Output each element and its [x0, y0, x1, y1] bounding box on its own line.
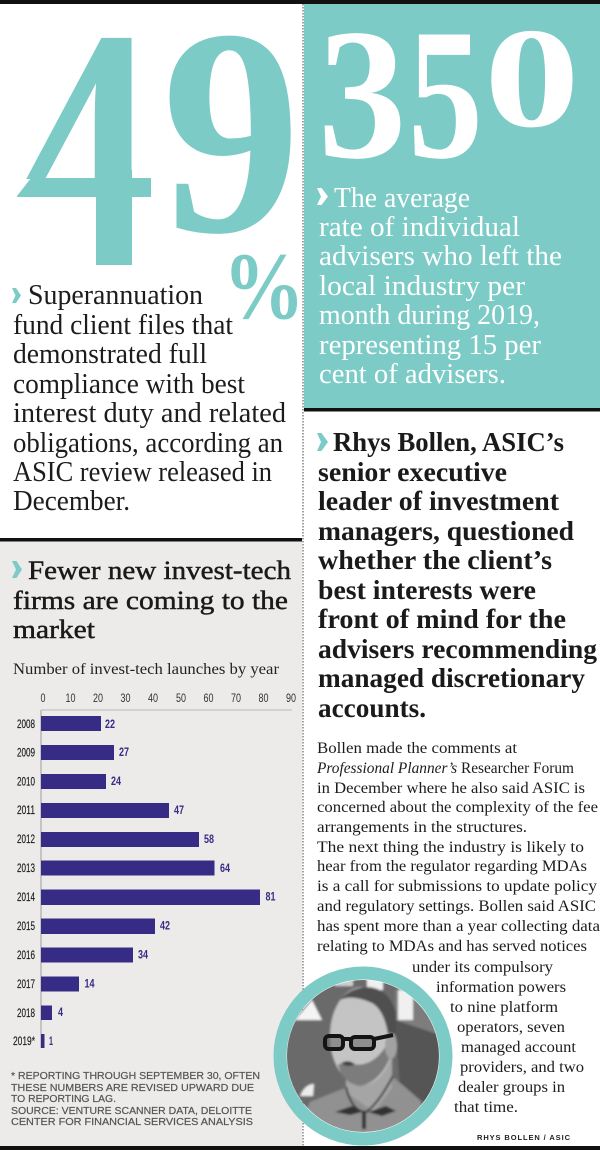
- text block: article body: in December where he also said ASIC is: [317, 780, 585, 797]
- text block: article body: has spent more than a year collecting data: [317, 918, 600, 935]
- big number: 350: [318, 0, 580, 198]
- text block: superannuation description: Superannuation: [28, 280, 203, 311]
- text block: article body: under its compulsory: [412, 959, 553, 976]
- year labels: [13, 719, 35, 1048]
- heading: Rhys Bollen pull quote: managed discretionary: [318, 663, 585, 693]
- heading: fewer new invest-tech firms: market: [13, 615, 96, 644]
- heading: Rhys Bollen pull quote: senior executive: [318, 457, 507, 487]
- heading: Rhys Bollen pull quote: accounts.: [318, 693, 426, 723]
- x axis labels: 80: [258, 693, 268, 705]
- value labels: 58: [204, 834, 214, 846]
- value labels: 4: [58, 1007, 63, 1019]
- text block: article body: that time.: [454, 1099, 518, 1116]
- heading: fewer new invest-tech firms: Fewer new invest-tech: [28, 556, 291, 585]
- icon: chevron: [317, 188, 328, 205]
- text block: article body: information powers: [436, 979, 566, 996]
- x axis labels: 0: [40, 693, 46, 705]
- x axis labels: 20: [93, 693, 103, 705]
- value labels: 1: [49, 1036, 53, 1048]
- footnote and source: SOURCE: VENTURE SCANNER DATA, DELOITTE: [11, 1106, 252, 1117]
- text block: article body: The next thing the industry is likely to: [317, 839, 584, 856]
- value labels: [49, 719, 276, 1048]
- photo credit: RHYS BOLLEN / ASIC: [477, 1133, 571, 1142]
- year labels: 2013: [17, 863, 35, 875]
- panel: 49 per cent statistic: [12, 36, 298, 510]
- value labels: 34: [138, 950, 148, 962]
- panel: 350 advisers statistic: [317, 0, 580, 390]
- value labels: 24: [111, 776, 121, 788]
- panel: grey chart background: [0, 541, 302, 1146]
- text block: superannuation description: [13, 280, 286, 517]
- text block: superannuation description: ASIC review released in: [13, 457, 272, 488]
- panel: invest-tech chart section: [11, 556, 296, 1128]
- year labels: 2015: [17, 921, 35, 933]
- text block: article body: Professional Planner’s Researcher Forum: [316, 760, 575, 777]
- text block: article body: arrangements in the structures.: [317, 819, 527, 836]
- x axis labels: 30: [120, 693, 130, 705]
- x axis labels: 10: [66, 693, 76, 705]
- footnote and source: THESE NUMBERS ARE REVISED UPWARD DUE: [11, 1083, 254, 1094]
- text block: article body: and regulatory settings. Bollen said ASIC: [317, 898, 596, 915]
- text block: article body: [316, 740, 600, 1116]
- photo: portrait of Rhys Bollen: [280, 973, 446, 1139]
- text block: superannuation description: demonstrated full: [13, 339, 207, 370]
- x axis labels: 90: [286, 693, 296, 705]
- text block: article body: dealer groups in: [458, 1079, 565, 1096]
- text block: superannuation description: obligations, according an: [13, 428, 283, 459]
- footnote and source: [11, 1071, 260, 1128]
- text block: article body: is a call for submissions to update policy: [317, 878, 597, 895]
- footnote and source: TO REPORTING LAG.: [11, 1094, 116, 1105]
- x axis labels: 60: [204, 693, 214, 705]
- big number: 49%: [17, 36, 298, 320]
- text block: adviser exit rate: month during 2019,: [319, 300, 540, 331]
- heading: Rhys Bollen pull quote: Rhys Bollen, ASIC’s: [333, 427, 564, 457]
- year labels: 2010: [17, 776, 35, 788]
- text block: adviser exit rate: cent of advisers.: [319, 359, 506, 390]
- text block: adviser exit rate: [319, 183, 562, 390]
- year labels: 2008: [17, 719, 35, 731]
- year labels: 2017: [17, 979, 35, 991]
- heading: Rhys Bollen pull quote: [318, 427, 598, 723]
- text block: article body: relating to MDAs and has served notices: [317, 938, 587, 955]
- value labels: 81: [266, 892, 276, 904]
- year labels: 2019*: [13, 1036, 35, 1048]
- text block: article body: to nine platform: [450, 999, 559, 1016]
- chart subtitle: Number of invest-tech launches by year: [13, 661, 280, 678]
- heading: Rhys Bollen pull quote: whether the client’s: [318, 545, 552, 575]
- text block: superannuation description: interest duty and related: [13, 398, 286, 429]
- text block: superannuation description: fund client files that: [13, 310, 233, 341]
- big number: 49%: %: [223, 234, 305, 339]
- x axis labels: 50: [176, 693, 186, 705]
- heading: Rhys Bollen pull quote: leader of investment: [318, 486, 559, 516]
- year labels: 2011: [17, 805, 35, 817]
- text block: article body: managed account: [461, 1039, 577, 1056]
- bars: [41, 716, 260, 1048]
- text block: article body: concerned about the complexity of the fee: [317, 799, 598, 816]
- value labels: 42: [160, 920, 170, 932]
- x axis labels: [40, 693, 296, 705]
- x axis labels: 40: [148, 693, 158, 705]
- heading: Rhys Bollen pull quote: managers, questioned: [318, 516, 574, 546]
- footnote and source: * REPORTING THROUGH SEPTEMBER 30, OFTEN: [11, 1071, 260, 1082]
- year labels: 2012: [17, 834, 35, 846]
- text block: article body: Bollen made the comments at: [317, 740, 518, 757]
- icon: chevron: [12, 288, 21, 303]
- text block: adviser exit rate: local industry per: [319, 271, 526, 302]
- icon: chevron: [317, 433, 328, 451]
- panel: teal statistic background: [304, 4, 600, 408]
- heading: fewer new invest-tech firms: [13, 556, 291, 644]
- big number: 350: 0: [484, 0, 580, 157]
- heading: Rhys Bollen pull quote: best interests were: [318, 575, 536, 605]
- text block: adviser exit rate: The average: [334, 183, 470, 214]
- footnote and source: CENTER FOR FINANCIAL SERVICES ANALYSIS: [11, 1117, 253, 1128]
- icon: glasses: [325, 1035, 393, 1049]
- x axis labels: 70: [231, 693, 241, 705]
- year labels: 2016: [17, 950, 35, 962]
- icon: chevron: [12, 561, 22, 578]
- text block: superannuation description: compliance with best: [13, 369, 245, 400]
- text block: article body: operators, seven: [457, 1019, 565, 1036]
- value labels: 22: [105, 719, 115, 731]
- year labels: 2014: [17, 892, 35, 904]
- text block: article body: providers, and two: [460, 1059, 584, 1076]
- heading: Rhys Bollen pull quote: advisers recommending: [318, 634, 598, 664]
- heading: Rhys Bollen pull quote: front of mind for the: [318, 604, 566, 634]
- text block: adviser exit rate: advisers who left the: [319, 241, 562, 272]
- text block: adviser exit rate: rate of individual: [319, 212, 520, 243]
- value labels: 64: [220, 863, 230, 875]
- text block: article body: hear from the regulator regarding MDAs: [317, 858, 587, 875]
- text block: adviser exit rate: representing 15 per: [319, 330, 542, 361]
- value labels: 27: [119, 747, 129, 759]
- value labels: 47: [174, 805, 184, 817]
- heading: fewer new invest-tech firms: firms are coming to the: [13, 586, 288, 615]
- year labels: 2018: [17, 1008, 35, 1020]
- value labels: 14: [84, 978, 95, 990]
- panel: Rhys Bollen article: [280, 427, 600, 1142]
- year labels: 2009: [17, 748, 35, 760]
- bar chart: launches by year: [13, 693, 296, 1048]
- text block: superannuation description: December.: [13, 486, 130, 517]
